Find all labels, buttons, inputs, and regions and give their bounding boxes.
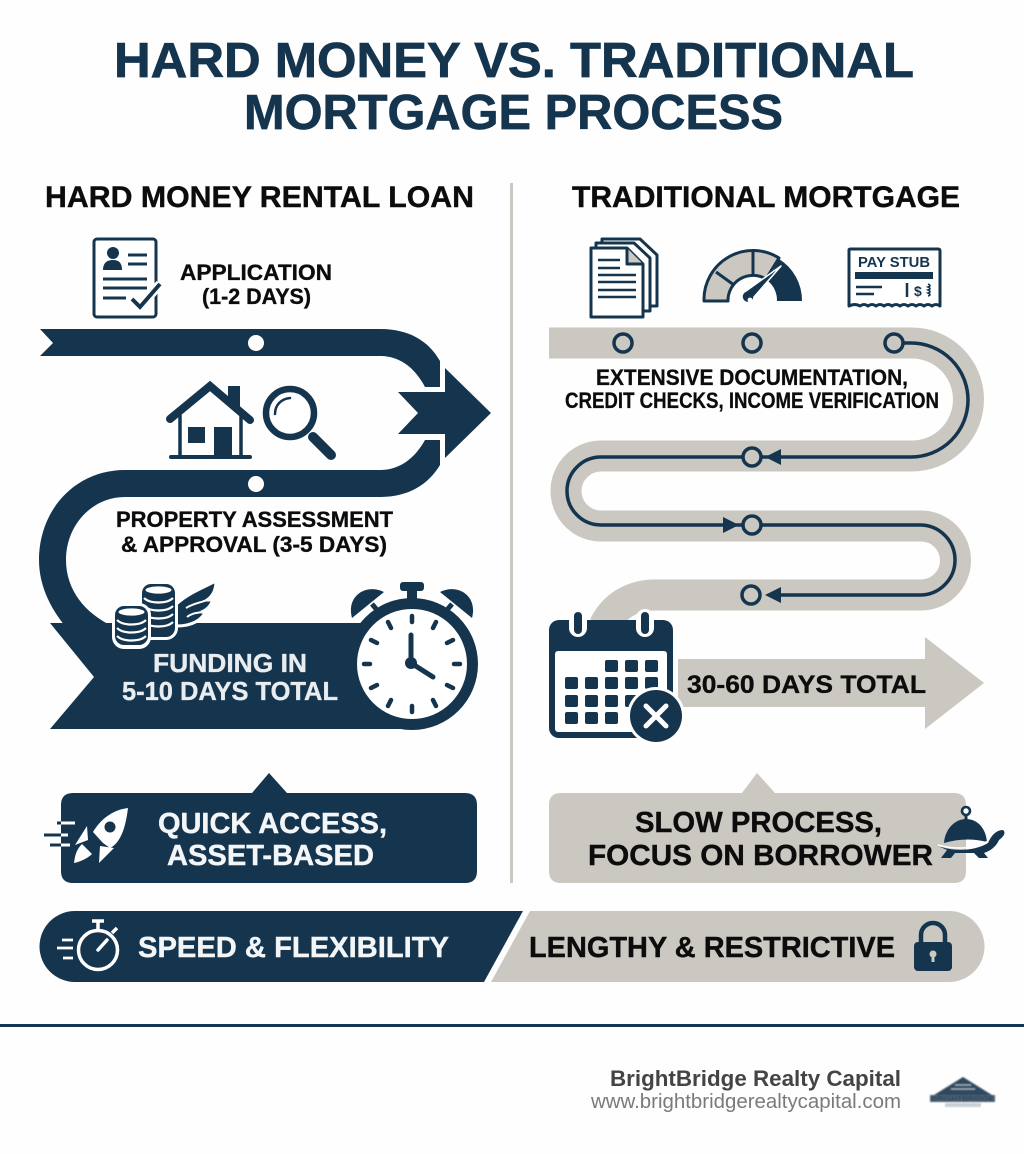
text: documentation: CREDIT CHECKS, INCOME VERIFICATION [565, 388, 939, 413]
logo: footer mark [930, 1077, 995, 1107]
text: total days: 30-60 DAYS TOTAL [687, 671, 926, 699]
text: documentation: EXTENSIVE DOCUMENTATION, [596, 365, 908, 390]
icon: alarm clock [346, 582, 478, 730]
heading: hard money rental loan: HARD MONEY RENTAL LOAN [45, 181, 474, 214]
icon: turtle [938, 807, 1004, 858]
text: documentation [565, 365, 939, 413]
heading: traditional mortgage: TRADITIONAL MORTGAGE [572, 181, 960, 214]
markers: timeline circles [614, 334, 903, 604]
text: funding [122, 650, 338, 706]
icon: house [169, 386, 252, 459]
arrow: middle arrow [398, 368, 491, 458]
icon: padlock [914, 923, 952, 971]
text: funding: 5-10 DAYS TOTAL [122, 678, 338, 706]
marker: top band dot [248, 335, 264, 351]
icon: magnifier [266, 389, 331, 455]
callout: quick access [44, 773, 477, 883]
bar: lengthy and restrictive [491, 911, 984, 982]
marker: lower band dot [248, 476, 264, 492]
text: slow process: FOCUS ON BORROWER [588, 840, 933, 872]
panel: traditional process [549, 239, 1004, 883]
icon: calendar [549, 609, 685, 745]
text: lengthy and restrictive: LENGTHY & RESTRICTIVE [529, 932, 895, 964]
footer: website: www.brightbridgerealtycapital.com [590, 1091, 901, 1113]
icon: pay stub [849, 249, 940, 306]
icon: document stack [591, 239, 657, 317]
panel: hard money process [39, 239, 491, 883]
arrow: total days [678, 637, 984, 729]
text: application [180, 260, 332, 309]
text: application: APPLICATION [180, 260, 332, 285]
ribbon: funding banner [50, 623, 400, 729]
logo: footer mark: BRIGHTBRIDGE [931, 1096, 994, 1103]
icon: winged coins [112, 580, 216, 649]
line: progress track [567, 343, 968, 603]
footer: brand name: BrightBridge Realty Capital [610, 1066, 901, 1091]
title: MORTGAGE PROCESS [244, 86, 783, 140]
text: speed and flexibility: SPEED & FLEXIBILITY [138, 932, 449, 964]
ribbon: lower curved band [39, 440, 440, 627]
icon: rocket [44, 808, 128, 863]
text: quick access: ASSET-BASED [167, 840, 374, 872]
icon: pay stub: PAY STUB [858, 255, 930, 271]
text: application: (1-2 DAYS) [202, 284, 311, 309]
text: property assessment: PROPERTY ASSESSMENT [116, 507, 393, 532]
text: slow process [588, 807, 933, 872]
text: quick access [158, 808, 387, 872]
text: property assessment: & APPROVAL (3-5 DAYS) [121, 532, 387, 557]
text: slow process: SLOW PROCESS, [635, 807, 882, 839]
title: HARD MONEY VS. TRADITIONAL [114, 34, 914, 88]
text: quick access: QUICK ACCESS, [158, 808, 387, 840]
callout: slow process [549, 773, 1004, 883]
icon: stopwatch [57, 921, 118, 970]
icon: credit gauge [704, 251, 802, 303]
road: serpentine timeline [549, 343, 968, 626]
icon: pay stub: $ [914, 283, 922, 299]
bar: speed and flexibility [39, 911, 523, 982]
title [114, 34, 914, 140]
text: property assessment [116, 507, 393, 557]
text: funding: FUNDING IN [153, 650, 307, 678]
ribbon: top band [40, 329, 440, 387]
icon: application document [94, 239, 160, 317]
